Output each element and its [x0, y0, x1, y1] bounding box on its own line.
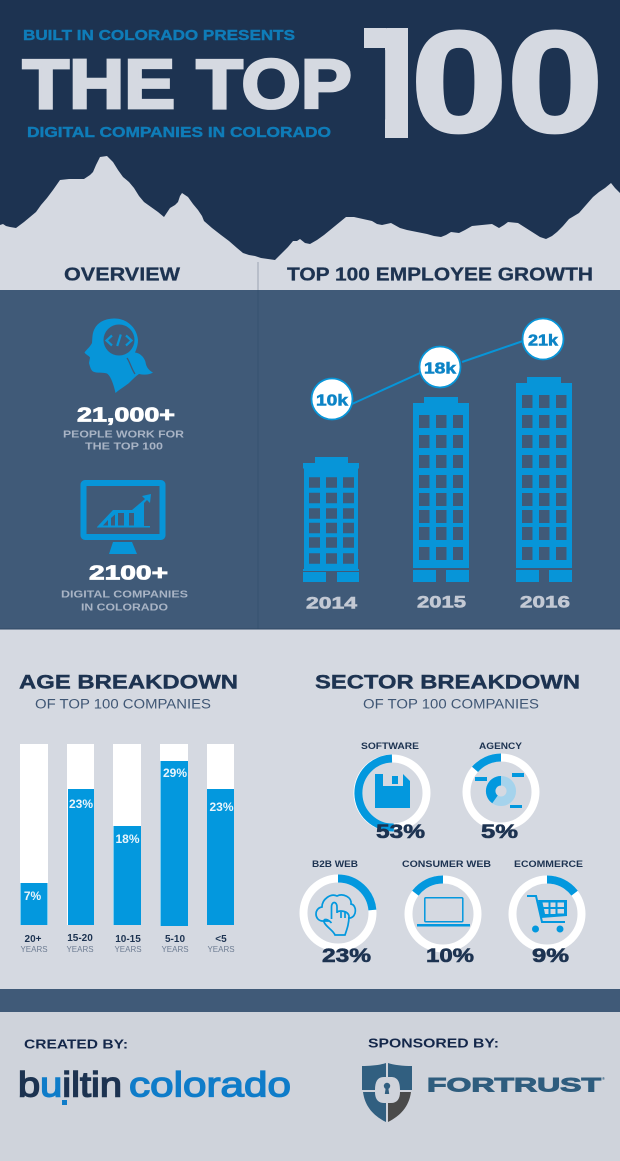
sponsored by label: SPONSORED BY:	[368, 1036, 499, 1050]
chart: age bar chart: <5	[215, 934, 227, 945]
chart: age bar chart: 23%	[69, 797, 93, 811]
title: 100: 00	[411, 1, 603, 162]
footer	[0, 1012, 620, 1161]
chart: age bar chart: YEARS	[161, 945, 189, 954]
year labels: 2014	[306, 594, 358, 612]
sector: agency: 5%	[481, 822, 518, 843]
building 2016	[516, 377, 572, 582]
chart: age bar chart: 5-10	[165, 934, 185, 945]
sector: consumer web: CONSUMER WEB	[402, 859, 492, 869]
icon: head with code	[84, 318, 153, 393]
footer band	[0, 989, 620, 1012]
chart: age bar chart: 29%	[163, 766, 187, 780]
logo: fortrust wordmark: FORTRUST	[427, 1076, 602, 1096]
heading: age breakdown: AGE BREAKDOWN	[19, 672, 238, 694]
title: 100: 1	[350, 0, 437, 171]
chart: age bar chart: YEARS	[207, 945, 235, 954]
label: people work for the top 100: THE TOP 100	[85, 440, 163, 452]
chart: age bar chart: 7%	[24, 889, 42, 903]
chart: age bar chart: 18%	[115, 832, 140, 846]
sector: agency	[466, 741, 536, 843]
label: digital companies in colorado: DIGITAL COMPANIES	[61, 588, 188, 600]
sector: software	[358, 741, 426, 843]
sector: consumer web	[402, 859, 492, 967]
sector: ecommerce: ECOMMERCE	[514, 859, 583, 869]
chart: age bar chart: YEARS	[114, 945, 142, 954]
sector: ecommerce	[512, 859, 583, 967]
title: 100	[364, 28, 598, 138]
subtitle: digital companies in colorado: DIGITAL COMPANIES IN COLORADO	[27, 124, 331, 141]
title: the top: THE TOP	[22, 45, 352, 123]
chart: age bar chart: YEARS	[20, 945, 48, 954]
logo: fortrust wordmark	[427, 1076, 605, 1096]
chart: age bar chart: YEARS	[66, 945, 94, 954]
heading: overview: OVERVIEW	[64, 264, 180, 284]
label: digital companies in colorado	[61, 588, 188, 614]
bubble: 21k	[522, 318, 564, 360]
label: people work for the top 100: PEOPLE WORK FOR	[63, 428, 184, 440]
sector: ecommerce: 9%	[532, 946, 569, 967]
logo: built in colorado: builtin	[18, 1066, 122, 1104]
icon: monitor with rising chart	[84, 483, 162, 554]
created by label: CREATED BY:	[24, 1036, 128, 1052]
year labels: 2016	[520, 592, 570, 612]
chart: age bar chart: 23%	[209, 800, 234, 814]
label: people work for the top 100	[63, 428, 184, 452]
bubble: 18k	[420, 346, 460, 388]
bubble: 18k: 18k	[424, 360, 456, 378]
bubble: 21k: 21k	[528, 332, 558, 350]
sector: b2b web: 23%	[322, 946, 371, 967]
chart: age bar chart: 20+	[25, 934, 42, 945]
sector: b2b web: B2B WEB	[312, 859, 359, 869]
logo: fortrust wordmark: ®	[602, 1076, 605, 1081]
sector: software: SOFTWARE	[361, 741, 419, 751]
bubble: 10k: 10k	[316, 392, 348, 410]
title: built in colorado presents: BUILT IN COLORADO PRESENTS	[23, 27, 295, 44]
logo: built in colorado	[18, 1066, 291, 1105]
panel: overview and growth	[0, 290, 620, 629]
chart: age bar chart: 10-15	[115, 934, 141, 945]
chart: age bar chart	[20, 744, 235, 954]
year labels	[306, 592, 570, 612]
logo: fortrust shield	[362, 1063, 412, 1122]
subheading: of top 100 companies (sector): OF TOP 100 COMPANIES	[363, 696, 539, 712]
logo: built in colorado: colorado	[129, 1066, 291, 1104]
heading: top 100 employee growth: TOP 100 EMPLOYEE GROWTH	[287, 264, 593, 284]
label: digital companies in colorado: IN COLORADO	[81, 602, 168, 614]
building 2015	[413, 397, 469, 582]
header with mountains	[0, 0, 620, 290]
sector: agency: AGENCY	[479, 741, 522, 751]
sector: software: 53%	[376, 822, 425, 843]
sector: consumer web: 10%	[426, 946, 474, 967]
stat: 2100+: 2100+	[89, 562, 168, 584]
sector: b2b web	[304, 859, 372, 967]
stat: 21,000+: 21,000+	[77, 404, 175, 426]
bubble: 10k	[312, 378, 352, 420]
year labels: 2015	[417, 592, 466, 612]
heading: sector breakdown: SECTOR BREAKDOWN	[315, 672, 580, 694]
growth line	[352, 341, 523, 404]
building 2014	[303, 457, 359, 582]
chart: age bar chart: 15-20	[67, 933, 93, 944]
subheading: of top 100 companies (age): OF TOP 100 COMPANIES	[35, 696, 211, 712]
